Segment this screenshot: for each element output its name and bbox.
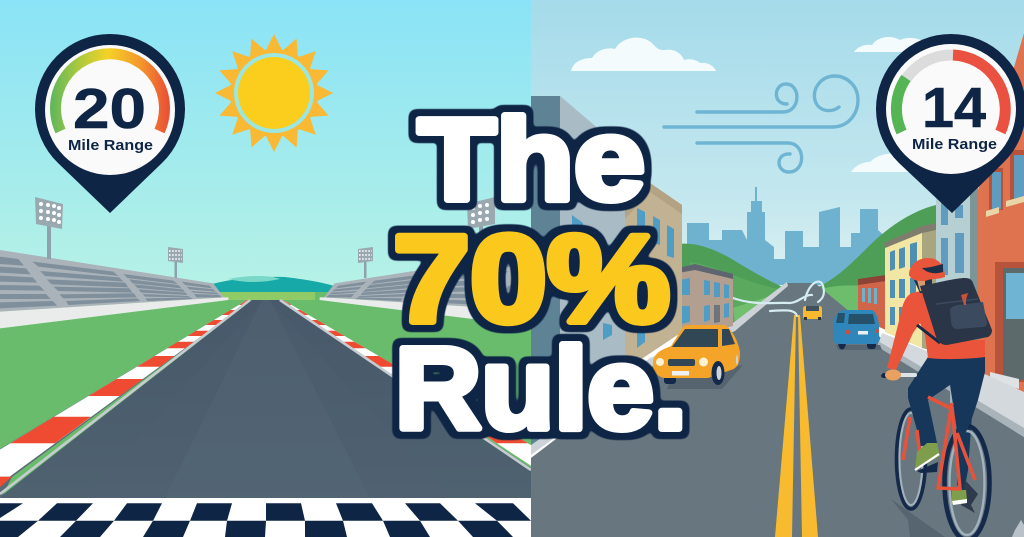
city skyline [687,187,900,285]
checkered finish line [0,498,531,537]
blue car [833,310,882,350]
cloud: large [571,38,716,71]
torso and arm [887,290,985,370]
title line: The: The [418,94,645,224]
title line: 70%: 70% [393,210,670,348]
number: 14: 14 [922,76,986,140]
left curb [0,300,251,500]
near bicycle wheel [944,426,990,537]
icon: wind lines [664,76,858,172]
head and helmet [909,258,945,293]
panel: race track scene [0,0,585,537]
hand and handlebar [881,370,917,380]
panel: city street scene [531,0,1024,537]
label: mile range: Mile Range [68,137,153,154]
distant hills [214,276,333,292]
floodlight: small right [358,247,373,278]
race track asphalt [0,300,531,500]
pin: 20 mile range [35,34,185,213]
building: tan [625,183,682,359]
pin: 14 mile range [876,34,1024,213]
building: orange [978,33,1024,395]
right grandstand [320,264,512,320]
right curb [279,299,531,471]
cloud: top right [854,37,925,52]
yellow centre lines [775,315,818,537]
bicycle frame [903,397,975,489]
building: gray blue [531,96,625,445]
cyclist on bicycle [881,258,992,537]
right buildings [858,33,1024,437]
orange car [653,325,743,389]
left buildings [531,96,733,445]
title: The 70% Rule. [393,94,687,454]
gauge: grey unused [906,55,953,79]
gauge: green [896,78,906,132]
gauge: red [953,55,1005,132]
building: blue grey [936,188,978,340]
shoe [915,443,940,473]
gauge: full range [56,54,164,131]
small yellow car [803,306,822,320]
far pedal and leg [952,415,978,513]
left grandstand [0,250,228,328]
building: far red [858,275,886,330]
legs [908,357,985,460]
road [531,283,1024,537]
backpack [917,278,992,345]
sun icon [215,34,333,152]
number: 20: 20 [73,77,146,141]
bicycle shadow [891,499,945,537]
far road swirl [733,282,824,316]
road edge [531,282,788,455]
seat post and saddle [947,371,973,410]
floodlight: large left [35,197,63,259]
building: yellow [884,223,936,352]
green hills [678,205,936,345]
sidewalk [878,333,1024,437]
cloud: lower right [851,154,915,172]
far bicycle wheel [896,409,926,509]
floodlight: large right [467,197,495,232]
infield grass [0,292,531,502]
floodlight: small left [168,247,183,278]
label: mile range: Mile Range [912,136,997,153]
title line: Rule.: Rule. [395,324,687,454]
building: brown [678,264,733,340]
